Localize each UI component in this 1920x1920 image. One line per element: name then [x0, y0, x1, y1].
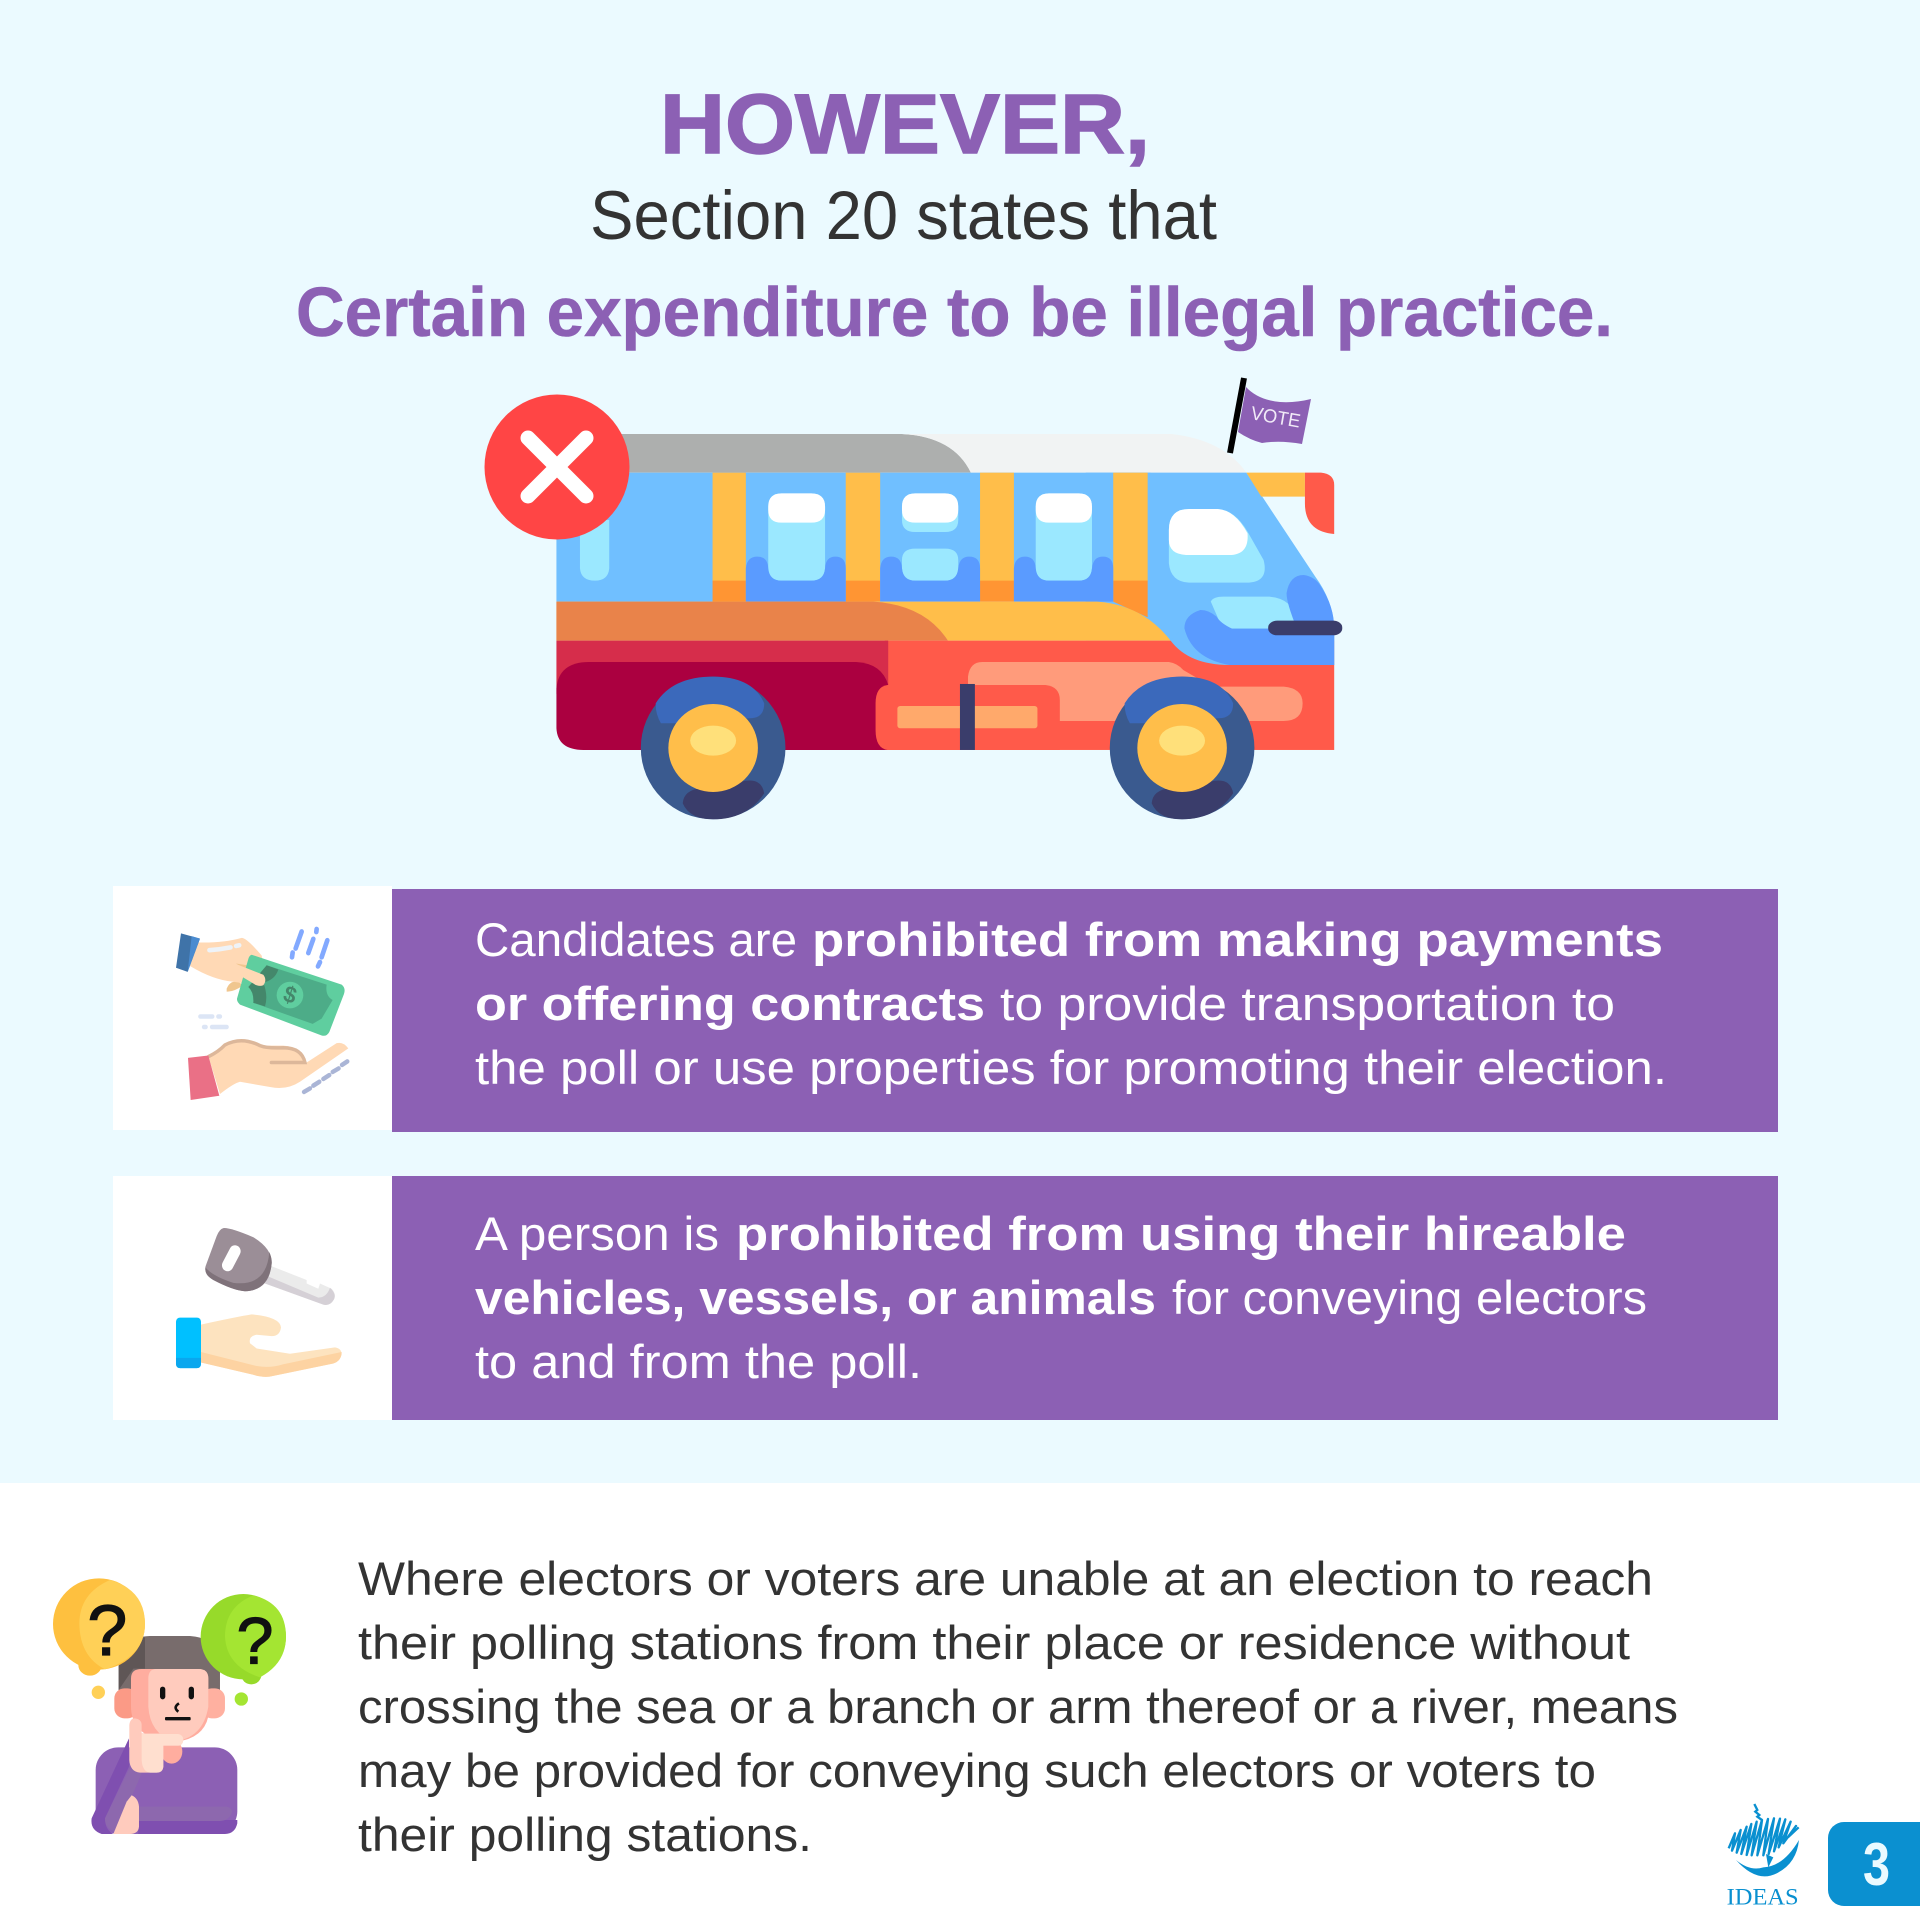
title: HOWEVER,: [660, 77, 1150, 171]
panel text: for conveying electors: [1172, 1271, 1647, 1324]
left wheel: [641, 677, 785, 819]
panel text: A person is: [475, 1207, 719, 1260]
text block: polling stations: may be provided for conveying such electors or voters to: [358, 1744, 1596, 1797]
icon: vote flag: VOTE: [1249, 403, 1302, 433]
panel text: vehicles, vessels, or animals: [475, 1271, 1156, 1324]
panel body: [392, 889, 1778, 1132]
text block: polling stations: Where electors or voters are unable at an election to reach: [358, 1552, 1653, 1605]
icon: thinking person: ?: [237, 1603, 273, 1677]
icon: campaign bus: [556, 434, 1342, 819]
icon: vote flag: [1230, 378, 1311, 453]
panel body: [392, 1176, 1778, 1420]
icon: thinking person: ?: [87, 1591, 127, 1671]
title: Certain expenditure to be illegal practice.: [296, 273, 1613, 351]
title: Section 20 states that: [590, 177, 1217, 254]
icon: thinking person: [53, 1578, 286, 1834]
panel text: or offering contracts: [475, 977, 985, 1030]
panel: hireable vehicles: [113, 1176, 1778, 1420]
panel text: prohibited from using their hireable: [736, 1207, 1626, 1260]
panel text: the poll or use properties for promoting their election.: [475, 1041, 1667, 1094]
text block: polling stations: their polling stations from their place or residence without: [358, 1616, 1630, 1669]
panel text: to provide transportation to: [1000, 977, 1615, 1030]
panel text: Candidates are: [475, 913, 797, 966]
panel text: prohibited from making payments: [812, 913, 1663, 966]
title: [296, 77, 1613, 351]
text block: polling stations: crossing the sea or a branch or arm thereof or a river, means: [358, 1680, 1678, 1733]
logo: IDEAS: IDEAS: [1727, 1885, 1799, 1911]
icon panel: money exchange: $: [280, 981, 300, 1009]
icon panel: money exchange: [113, 886, 392, 1130]
logo: IDEAS: [1727, 1804, 1799, 1911]
page number badge: 3: [1863, 1831, 1890, 1898]
right wheel: [1110, 677, 1254, 819]
icon panel: key and hand: [113, 1176, 392, 1420]
panel: payments: [113, 886, 1778, 1132]
page number badge: [1828, 1822, 1920, 1906]
text block: polling stations: their polling stations.: [358, 1808, 812, 1861]
text block: polling stations: [358, 1552, 1678, 1861]
panel text: [475, 913, 1667, 1094]
icon: red cross: [484, 394, 630, 540]
panel text: [475, 1207, 1647, 1388]
panel text: to and from the poll.: [475, 1335, 922, 1388]
